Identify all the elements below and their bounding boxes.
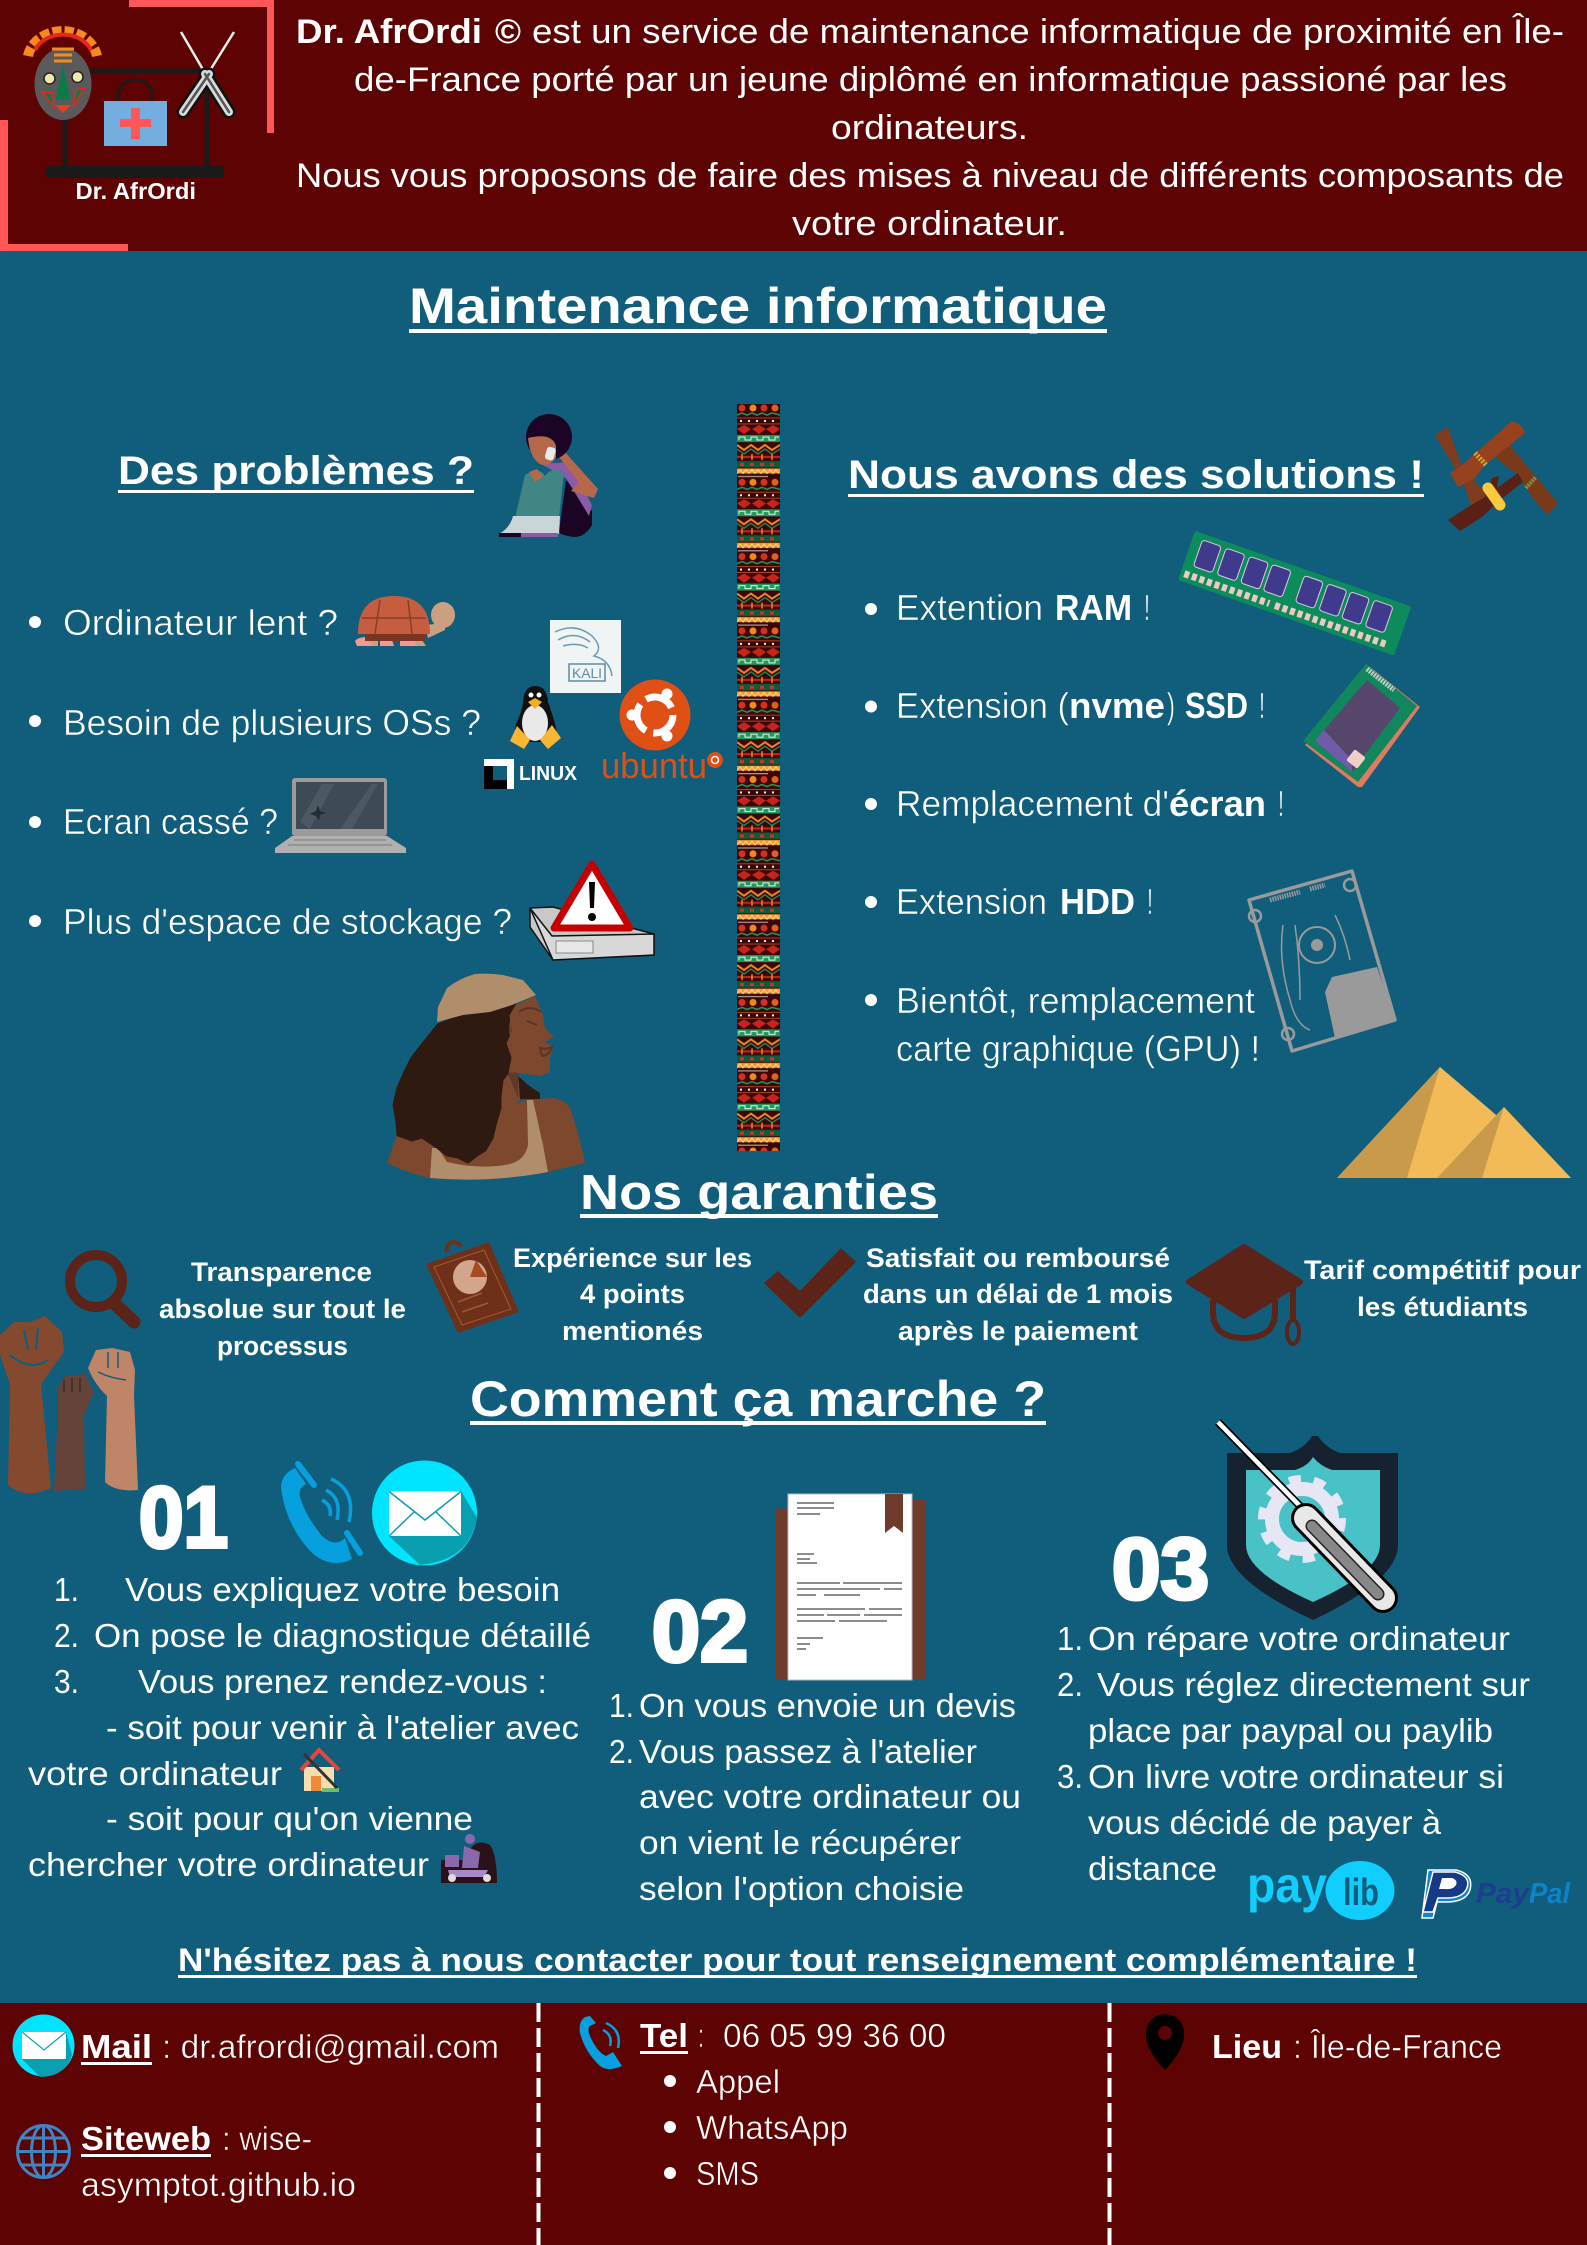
icon: quote document [775,1494,925,1680]
icon: pyramids [1337,1067,1571,1178]
guarantee: satisfait ou remboursé: Satisfait ou remboursé [866,1243,1170,1273]
footer: website: asymptot.github.io [81,2166,356,2203]
footer: website: Siteweb [81,2120,211,2157]
icon: disk warning [530,864,654,960]
footer: telephone: : [698,2017,704,2054]
icon: house with screwdriver [301,1750,339,1792]
header intro text: © [495,13,521,51]
footer: mail: : dr.afrordi@gmail.com [162,2028,499,2065]
logo: PayPal [1422,1870,1571,1918]
footer: telephone [580,2016,946,2192]
solution: écran: ! [1278,783,1284,824]
step 03 text: vous décidé de payer à [1088,1804,1442,1841]
icon: shield with gear and screwdriver [1218,1422,1398,1620]
step 01 text: 3. [54,1663,79,1700]
step 03 text: 2. [1057,1666,1083,1703]
guarantee: tarif étudiants [1189,1247,1582,1344]
solution: SSD: SSD [1185,685,1248,726]
footer: telephone: Appel [696,2063,780,2100]
guarantee: tarif étudiants: Tarif compétitif pour [1304,1255,1582,1285]
step 02 text: On vous envoie un devis [639,1687,1016,1724]
solution: HDD: Extension [896,881,1047,922]
footer: website: : wise- [222,2120,312,2157]
step 03 text: distance [1088,1850,1217,1887]
guarantee: tarif étudiants: les étudiants [1357,1292,1528,1322]
icon: phone [281,1464,360,1563]
solution: SSD: Extension ( [896,685,1069,726]
step 02 text [609,1687,1021,1907]
solution: écran: écran [1169,783,1266,824]
title: Maintenance informatique: Maintenance informatique [409,278,1107,334]
icon: hard drive [1249,871,1395,1051]
step 03 [1057,1422,1571,1920]
icon: SSD [1303,664,1420,787]
solution: SSD: nvme [1069,685,1165,726]
solution: SSD: ) [1167,685,1175,726]
step 03 text: 3. [1057,1758,1083,1795]
step 01 text: chercher votre ordinateur [28,1846,429,1883]
list: problems [29,596,723,960]
number 03: 03 [1112,1522,1209,1618]
step 03 text: place par paypal ou paylib [1088,1712,1493,1749]
heading: Nos garanties: Nos garanties [580,1166,938,1220]
solution: écran [865,783,1284,824]
footer: mail [12,2014,499,2077]
heading: Nous avons des solutions !: Nous avons des solutions ! [848,453,1424,497]
icon: crying woman [499,414,598,537]
icon: Kali logo [550,620,621,693]
step 01 text: - soit pour qu'on vienne [106,1800,473,1837]
header intro text: ordinateurs. [831,109,1028,147]
step 01 text: Vous prenez rendez-vous : [138,1663,547,1700]
logo: Paylib [1247,1857,1394,1920]
guarantee: transparence: absolue sur tout le [159,1294,406,1324]
step 03 text: On livre votre ordinateur si [1088,1758,1504,1795]
footer: location [1146,2014,1502,2070]
guarantee: transparence: processus [217,1331,348,1361]
icon: envelope circle [372,1460,477,1566]
guarantee: transparence: Transparence [191,1257,372,1287]
logo: Paylib: lib [1343,1872,1379,1914]
heading: Comment ça marche ?: Comment ça marche ? [470,1371,1046,1427]
number 01: 01 [139,1470,228,1566]
step 02 text: Vous passez à l'atelier [639,1733,977,1770]
step 02 text: 2. [609,1733,634,1770]
guarantee: transparence [70,1255,406,1361]
guarantee: satisfait ou remboursé [764,1243,1173,1346]
contact call to action: N'hésitez pas à nous contacter pour tout renseignement complémentaire ! [178,1942,1417,1978]
guarantee: expérience: Expérience sur les [513,1243,752,1273]
decorative patterned vertical strip [737,404,780,1151]
footer band [0,2003,1587,2245]
step 02 [609,1494,1021,1907]
header intro text: est un service de maintenance informatique de proximité en Île- [532,13,1564,51]
solution: GPU [865,980,1260,1069]
icon: clipboard [426,1242,519,1333]
step 02 text: on vient le récupérer [639,1824,961,1861]
header intro text: de-France porté par un jeune diplômé en informatique passioné par les [354,61,1507,99]
step 03 text [1057,1620,1530,1887]
icon: graduation cap [1189,1247,1300,1344]
step 01 text: On pose le diagnostique détaillé [94,1617,591,1654]
logo: Dr. AfrOrdi: Dr. AfrOrdi [76,178,196,204]
list: solutions [865,531,1420,1069]
icon: Ubuntu logo [601,680,723,786]
step 03 text: 1. [1057,1620,1083,1657]
step 01 text: votre ordinateur [28,1755,282,1792]
step 01 text: 2. [54,1617,79,1654]
solution: RAM [865,587,1150,628]
solution: HDD: HDD [1060,881,1135,922]
logo: Dr. AfrOrdi [0,0,274,251]
icon: Linux wordmark [484,759,578,789]
step 01 text [28,1571,591,1883]
problem: stockage: Plus d'espace de stockage ? [63,901,512,942]
problem: plusieurs OSs: Besoin de plusieurs OSs ? [63,702,481,743]
solution: HDD: ! [1147,881,1153,922]
problem: écran cassé: Ecran cassé ? [63,801,278,842]
header intro text: Dr. AfrOrdi [296,13,482,51]
logo: PayPal: Pal [1529,1878,1571,1910]
guarantee: satisfait ou remboursé: dans un délai de 1 mois [863,1279,1173,1309]
solution: RAM: ! [1144,587,1150,628]
step 01 text: Vous expliquez votre besoin [125,1571,560,1608]
footer: telephone: SMS [696,2155,759,2192]
icon: map pin [1146,2014,1184,2070]
step 03 text: Vous réglez directement sur [1097,1666,1530,1703]
number 02: 02 [652,1584,748,1680]
step 01 text: - soit pour venir à l'atelier avec [106,1709,579,1746]
logo: Paylib: pay [1247,1857,1327,1913]
header intro text [296,13,1564,243]
icon: magnifier [70,1255,134,1322]
step 01 text: 1. [54,1571,79,1608]
solution: SSD [865,685,1265,726]
icon: Kali logo: KALI [572,665,602,681]
footer: telephone: 06 05 99 36 00 [723,2017,946,2054]
footer: telephone: Tel [640,2017,688,2054]
icon: delivery scooter [441,1834,497,1883]
icon: check mark [764,1248,856,1318]
icon: broken laptop [275,778,406,853]
solution: GPU: Bientôt, remplacement [896,980,1255,1021]
icon: tortoise [355,596,455,646]
problem: ordinateur lent: Ordinateur lent ? [63,602,338,643]
header band [0,0,1587,251]
icon: raised fists [0,1316,138,1493]
icon: RAM stick [1178,531,1411,656]
solution: écran: Remplacement d' [896,783,1169,824]
footer: website [18,2120,356,2203]
guarantee: expérience: 4 points [580,1279,685,1309]
solution: RAM: Extention [896,587,1043,628]
footer: location: Lieu [1212,2028,1282,2065]
icon: Tux penguin [510,686,561,749]
icon: joined hands [1435,421,1558,531]
logo: PayPal: Pay [1476,1878,1531,1910]
step 02 text: 1. [609,1687,634,1724]
header intro text: Nous vous proposons de faire des mises à niveau de différents composants de [296,157,1564,195]
guarantee: satisfait ou remboursé: après le paiement [898,1316,1138,1346]
icon: woman portrait [387,974,585,1180]
step 02 text: avec votre ordinateur ou [639,1778,1021,1815]
solution: SSD: ! [1259,685,1265,726]
heading: Des problèmes ?: Des problèmes ? [118,449,474,493]
solution: GPU: carte graphique (GPU) ! [896,1028,1260,1069]
icon: Linux wordmark: LINUX [519,763,578,785]
icon: phone [580,2016,622,2069]
step 01 [28,1460,591,1883]
footer: telephone: WhatsApp [696,2109,848,2146]
footer: mail: Mail [81,2028,152,2065]
solution: RAM: RAM [1055,587,1132,628]
footer: location: : Île-de-France [1293,2028,1502,2065]
solution: HDD [865,881,1153,922]
guarantee: expérience: mentionés [562,1316,703,1346]
header intro text: votre ordinateur. [792,205,1067,243]
icon: mail [12,2014,74,2077]
icon: globe [18,2125,70,2178]
guarantee: expérience [426,1242,752,1346]
step 02 text: selon l'option choisie [639,1870,964,1907]
icon: Ubuntu logo: ubuntu [601,745,707,786]
step 03 text: On répare votre ordinateur [1088,1620,1510,1657]
